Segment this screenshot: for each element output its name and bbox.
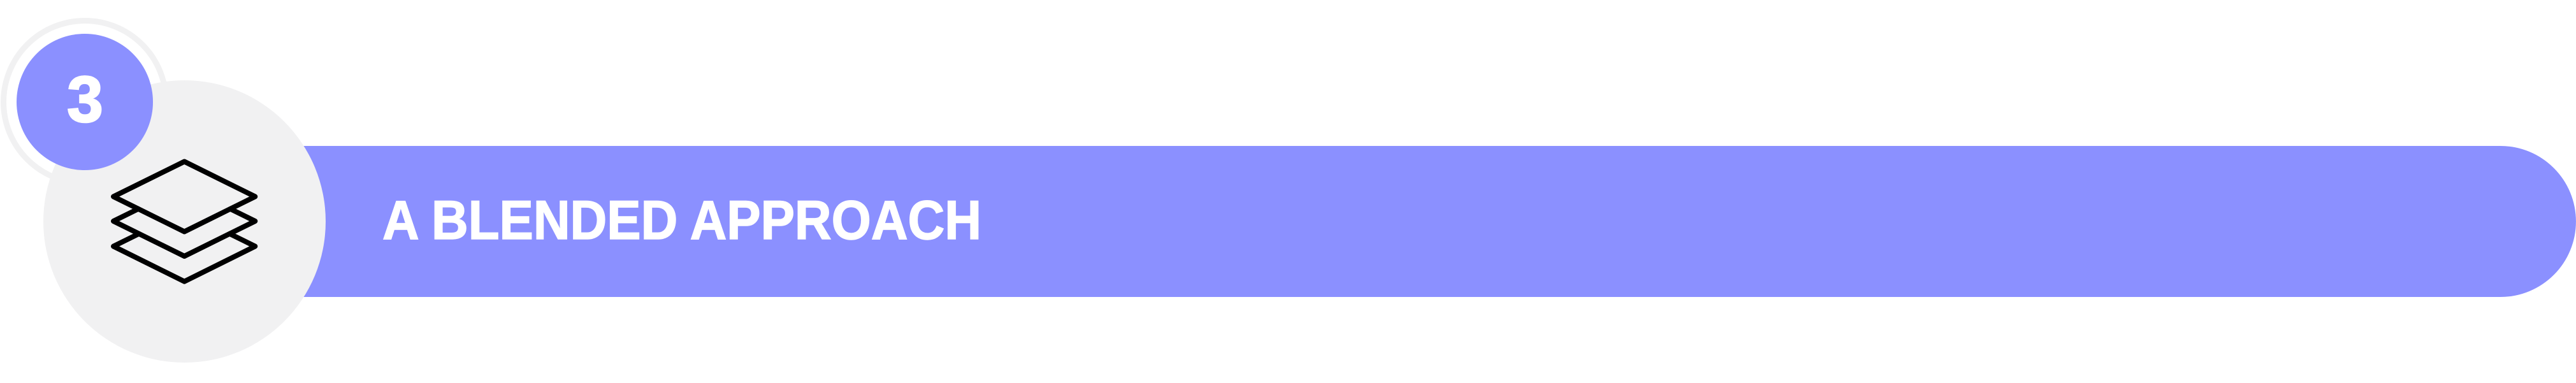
icon circle: [43, 80, 326, 363]
title: A BLENDED APPROACH: [382, 190, 981, 251]
banner bar: [191, 146, 2576, 297]
number ring: [4, 20, 166, 184]
icon: stacked layers: [113, 162, 255, 282]
number badge: [17, 34, 153, 170]
number 3: 3: [67, 63, 103, 136]
